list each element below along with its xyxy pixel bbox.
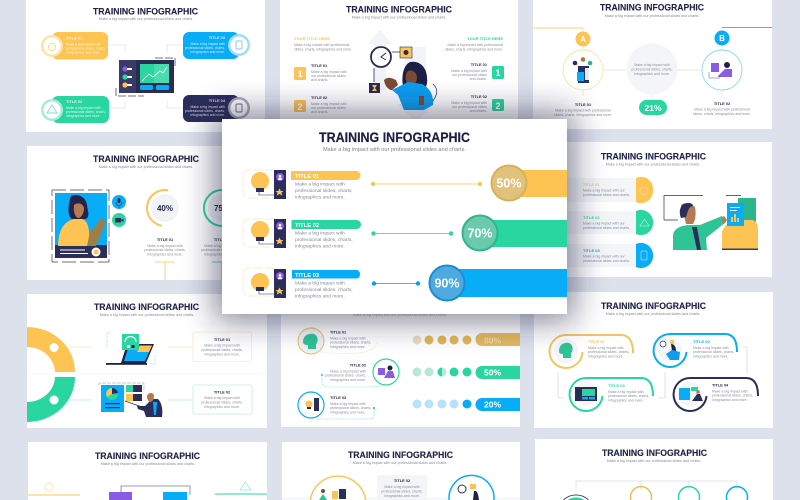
icon: microphone [112,195,126,209]
circle: left illustration [310,476,366,500]
centre text bubble: Make a big impact with [634,63,670,67]
illustration: presenter with document [664,196,758,250]
tree connector [576,481,737,490]
text: title 01: Make a big impact with [147,244,183,248]
title pill: TITLE 03 [295,273,320,279]
description: professional slides, charts, [295,188,353,194]
box: title 01: infographics and more. [204,352,240,356]
text: title 02: TITLE 02 [714,101,731,106]
centre text bubble [626,44,678,94]
track: title 01: Make a big impact with [588,346,624,350]
description [295,182,353,200]
heading: TRAINING INFOGRAPHIC [94,302,199,313]
description: infographics and more. [295,294,345,300]
slide: middle right, presenter with three titles [533,142,772,277]
row: title 03: professional slides, charts, [330,406,371,410]
slide: middle left, video call and progress rings [27,146,267,280]
illustration: laptop [106,332,155,365]
box: title 01: TITLE 01 [214,337,231,342]
icon: clock [369,47,412,93]
text: title 01 [144,237,186,256]
icon: stopwatch [45,483,53,491]
heading: TRAINING INFOGRAPHIC [602,448,707,459]
option B [702,28,772,90]
right column: and charts. [470,109,487,113]
illustration: presenter with pie chart [99,383,162,417]
subheading: Make a big impact with our professional slides and charts. [353,312,447,316]
track: title 02: Make a big impact with [693,346,729,350]
node: root [564,495,588,500]
title pill [292,270,360,279]
description: Make a big impact with [295,230,345,236]
scale: 80%: 80% [484,336,501,346]
slide: bottom centre, two circles [282,442,520,500]
slide: row three left, half rings with laptop [27,294,267,428]
value badge: 90% [434,276,460,290]
box: title 01: professional slides, charts, [201,348,243,352]
slide: top left, four cards around monitor [26,0,265,132]
heading: TRAINING INFOGRAPHIC [601,301,706,312]
row: title 01 [545,177,653,203]
connector line [371,231,453,236]
node: yellow [630,487,652,500]
right column: our professional slides [452,105,487,109]
heading: TRAINING INFOGRAPHIC [93,154,199,165]
row: title 02: TITLE 02 [350,362,367,368]
connector line [371,182,482,186]
connector line [372,281,420,286]
right column: TITLE 02 [471,94,488,99]
subheading: Make a big impact with our professional slides and charts. [352,16,446,20]
illustration: video call [52,190,109,262]
chart: 75% ring [204,190,240,226]
right column [445,36,504,113]
scale: 50% [412,366,520,379]
row: title 01: professional slides and charts. [583,193,630,197]
subheading: Make a big impact with our professional slides and charts. [607,459,701,463]
subheading: Make a big impact with our professional slides and charts. [100,313,194,317]
value badge [462,216,498,250]
left column: TITLE 01 [311,63,328,68]
left column: Make a big impact with [311,70,347,74]
track: title 02: professional slides, charts, [693,350,734,354]
right column: YOUR TITLE HERE [467,36,503,41]
subheading: Make a big impact with our professional slides and charts. [323,147,466,153]
row: title 02: infographics and more. [330,378,366,382]
title pill [292,220,361,229]
scale: 50%: 50% [484,368,501,378]
box: title 02: Make a big impact with [384,485,420,489]
left column: TITLE 02 [311,95,328,100]
row: title 01 [243,166,567,200]
row: title 02 [243,216,567,250]
card: title 01: professional slides, charts, [66,46,106,50]
row: title 02: Make a big impact with our [583,222,625,226]
heading: TRAINING INFOGRAPHIC [95,451,200,462]
card: title 04: TITLE 04 [209,98,226,103]
centre text bubble: infographics and more. [634,72,670,76]
box: title 02: TITLE 02 [214,390,231,394]
row: title 02 [321,359,399,387]
track: title 03: Make a big impact with [608,390,644,394]
icon: camera [112,213,126,227]
slide: top centre, clock and woman [280,0,518,133]
heading: TRAINING INFOGRAPHIC [93,6,198,18]
description: professional slides, charts, [295,237,353,243]
text: title 02: infographics and more. [204,252,240,256]
row: title 02: Make a big impact with [330,370,366,374]
chart: 75% ring: 75% [214,204,230,213]
track: title 01: infographics and more. [588,354,624,358]
icon: bulb and badge panel [243,268,286,298]
track: title 04: TITLE 04 [712,382,729,388]
row: title 01: Make a big impact with our [583,188,625,192]
row: title 03 [243,266,567,300]
subheading: Make a big impact with our professional slides and charts. [353,461,447,465]
box: title 02 [377,475,427,500]
row: title 03 [298,392,375,419]
icon: bulb and badge panel [243,170,286,199]
bar [480,220,567,247]
card: title 03: professional slides, charts, [185,46,225,50]
box: title 02: Make a big impact with [204,396,240,400]
track: title 01: TITLE 01 [588,339,605,344]
description: infographics and more. [295,194,345,200]
right column: TITLE 01 [471,62,488,67]
icon: monitor with chart [116,58,175,96]
card: title 03: Make a big impact with [190,42,225,46]
card: title 03: TITLE 03 [209,35,226,40]
slide: row three centre, dots scale [281,293,520,427]
chart: 40% ring [144,187,179,226]
left column: Make a big impact with [311,102,347,106]
track: title 02: TITLE 02 [693,339,710,344]
connectors [533,28,772,100]
card: title 03: infographics and more. [190,50,225,54]
right column: and charts. [470,77,487,81]
text: title 01: Make a big impact with professional [555,108,611,112]
main slide: featured training infographic [222,119,567,314]
row: title 01 [298,328,377,354]
track: title 02: infographics and more. [693,354,729,358]
row: title 03: infographics and more. [330,410,366,414]
option A [533,28,603,90]
right column: slides, charts, infographics and more. [445,48,503,52]
row: title 02: TITLE 02 [583,215,600,220]
card: title 01: infographics and more. [66,50,101,54]
card: title 03 [183,32,250,59]
text: title 01: TITLE 01 [157,237,174,242]
description: Make a big impact with [295,280,345,286]
box: title 02 [193,385,252,414]
left column: our professional slides [311,74,346,78]
right column: Make a big impact with [451,69,487,73]
title pill: TITLE 01 [295,174,320,180]
row: title 01: infographics and more. [330,345,366,349]
row: title 03: Make a big impact with [330,402,366,406]
slide: bottom left, process icons [28,442,267,500]
option B: B [719,34,725,43]
card: title 04: Make a big impact with [190,105,225,109]
track: title 04: Make a big impact with [712,390,748,394]
card: title 01: TITLE 01 [66,36,83,40]
left column: our professional slides [311,106,346,110]
slide: top right, A and B comparison [533,0,772,129]
card: title 01: Make a big impact with [66,42,101,46]
text: title 02: Make a big impact with [204,244,240,248]
box: title 02: TITLE 02 [394,478,411,483]
icon: triangle network [240,482,251,490]
track: title 01 [550,335,633,368]
track: title 02 [654,334,737,367]
text: title 02 [201,237,243,256]
description [295,280,353,300]
row: title 01: TITLE 01 [583,182,600,187]
heading: TRAINING INFOGRAPHIC [346,5,452,16]
row: title 01: Make a big impact with [330,336,366,340]
text: title 02: slides, charts, infographics and more. [693,112,751,116]
left column [294,36,352,114]
row: title 01: professional slides, charts, [330,340,371,344]
text: title 01 [554,102,612,117]
card: title 04 [183,95,250,122]
card: title 02 [41,96,109,123]
track: title 04: professional slides, charts, [712,394,753,398]
subheading: Make a big impact with our professional slides and charts. [605,14,699,18]
left column: 1 [297,69,303,79]
description: Make a big impact with [295,182,345,188]
slide: row three right, four rounded tracks [534,292,773,428]
card: title 02: TITLE 02 [66,99,83,104]
text: title 02: Make a big impact with professional [694,108,750,112]
left column: Make a big impact with professional [294,43,350,47]
card: title 02: professional slides, charts, [66,110,106,114]
right column: our professional slides [452,73,487,77]
text: title 02: TITLE 02 [214,237,231,242]
row: title 03: TITLE 03 [330,395,347,400]
subheading: Make a big impact with our professional slides and charts. [101,462,195,466]
heading: TRAINING INFOGRAPHIC [348,450,453,461]
text: title 01: TITLE 01 [575,102,592,107]
scale: 20%: 20% [484,400,501,410]
text: title 02 [693,101,751,116]
row: title 02 [545,210,653,235]
card: title 04: professional slides, charts, [185,109,225,113]
icon: up and down arrows [368,30,434,122]
connector lines [108,45,183,108]
box: title 02: professional slides, charts, [381,490,423,494]
track: title 03: professional slides, charts, [608,394,649,398]
right column: 1 [495,68,501,78]
option A: A [580,35,586,44]
left column: YOUR TITLE HERE [294,36,330,41]
row: title 03: professional slides and charts. [583,259,630,263]
bar [447,269,567,297]
percentage pill [639,100,667,115]
scale: 20% [412,398,520,411]
scale: 80% [412,333,520,346]
circle: right illustration [449,475,494,500]
subheading: Make a big impact with our professional slides and charts. [99,17,193,21]
value badge: 70% [467,226,493,240]
heading: TRAINING INFOGRAPHIC [600,2,704,14]
row: title 02: professional slides and charts. [583,226,630,230]
connector arrows [558,347,747,398]
row: title 01: TITLE 01 [330,330,347,334]
icon: bulb and badge panel [243,219,286,248]
left column: 2 [297,102,303,112]
slide: bottom right, tree diagram [535,439,773,500]
box: title 02: infographics and more. [384,494,420,498]
description: infographics and more. [295,244,345,250]
subheading: Make a big impact with our professional slides and charts. [606,312,700,316]
illustration: woman in blue [384,62,437,110]
box: title 01: Make a big impact with [204,344,240,348]
track: title 04: infographics and more. [712,398,748,402]
track: title 03: infographics and more. [608,398,644,402]
value badge [430,266,464,300]
card: title 04: infographics and more. [190,113,225,117]
box: title 02: professional slides, charts, [201,400,243,404]
description: professional slides, charts, [295,287,353,293]
card: title 02: Make a big impact with [66,106,101,110]
left column: slides, charts, infographics and more. [294,48,352,52]
centre text bubble: professional slides, charts, [631,68,673,72]
track: title 03: TITLE 03 [608,383,625,388]
right column: 2 [495,101,501,111]
node: green [679,487,700,500]
text: title 01: slides, charts, infographics and more. [554,113,612,117]
node: blue [726,487,748,500]
track: title 04 [674,378,758,411]
chart: half rings [27,327,75,422]
text: title 01: professional slides, charts, [144,248,186,252]
value badge [492,166,526,200]
text: title 01: infographics and more. [147,252,183,256]
left column: and charts. [311,110,328,114]
right column: Make a big impact with [451,101,487,105]
value badge: 50% [496,176,522,190]
heading: TRAINING INFOGRAPHIC [319,130,470,145]
left column: and charts. [311,78,328,82]
bracket and boxes [109,486,190,500]
track: title 03 [570,378,653,411]
description [295,230,353,250]
chart: 40% ring: 40% [157,204,173,213]
row: title 03: TITLE 03 [583,248,600,253]
heading: TRAINING INFOGRAPHIC [601,152,706,162]
subheading: Make a big impact with our professional slides and charts. [606,162,700,166]
right column: Make a big impact with professional [448,43,503,47]
card: title 01 [41,32,108,60]
title pill: TITLE 02 [295,223,319,229]
track: title 01: professional slides, charts, [588,350,629,354]
box: title 02: infographics and more. [204,405,240,409]
subheading: Make a big impact with our professional slides and charts. [99,165,193,169]
title pill [291,171,360,180]
percentage pill: 21% [644,103,662,113]
text: title 02: professional slides, charts, [201,248,243,252]
row: title 03: Make a big impact with our [583,254,625,258]
card: title 02: infographics and more. [66,114,101,118]
row: title 02: professional slides, charts, [325,374,366,378]
row: title 03 [545,243,653,268]
bar [509,170,567,197]
box: title 01 [193,332,252,362]
